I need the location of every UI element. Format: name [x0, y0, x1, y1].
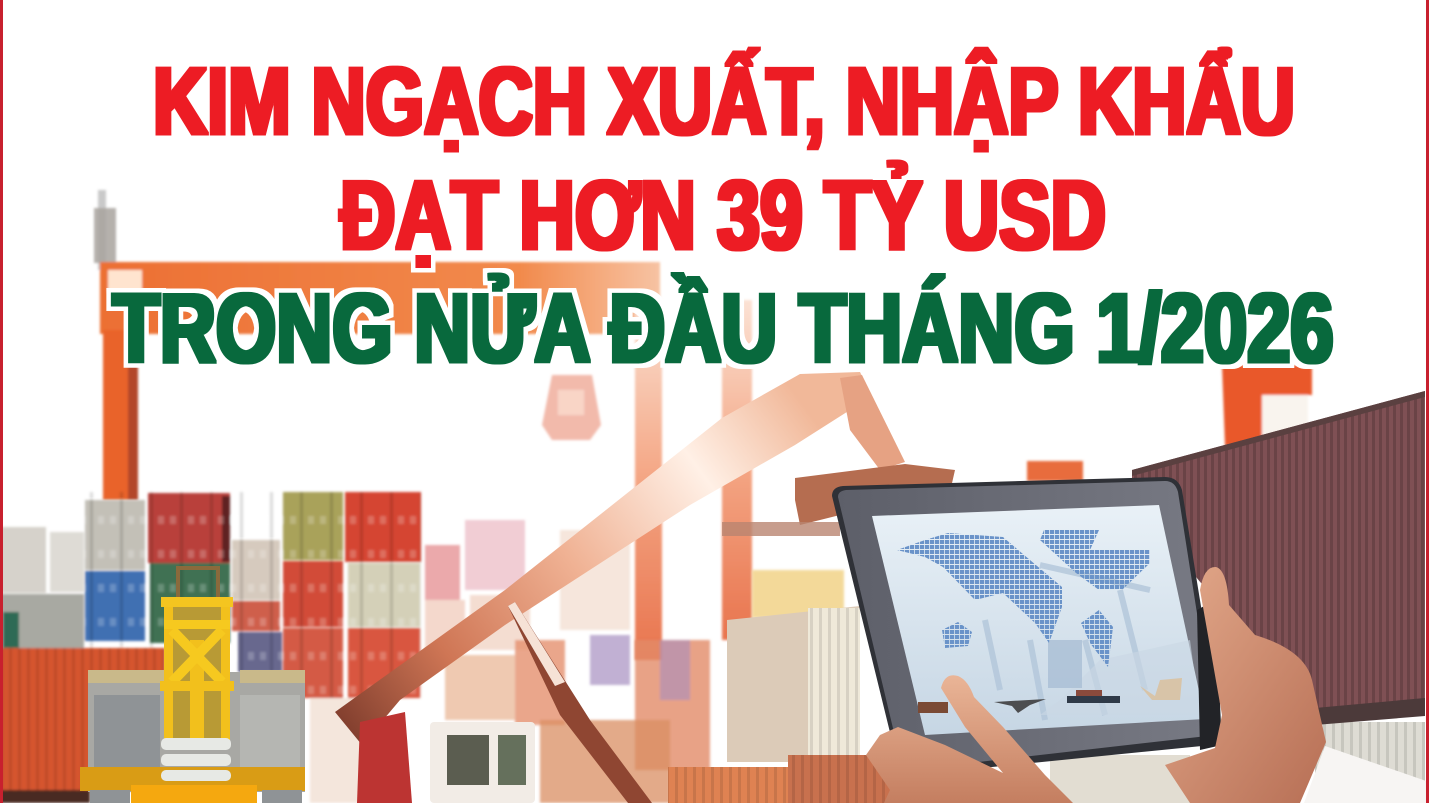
yellow forklift: [80, 568, 305, 803]
crane on screen: [985, 565, 1150, 720]
screen: [872, 505, 1205, 735]
hands: [866, 567, 1429, 803]
hydraulic ram: [508, 602, 652, 803]
left hand pointing finger: [866, 675, 1073, 803]
transport icons: [918, 678, 1182, 713]
tablet dark grip edge: [1197, 600, 1222, 750]
tablet with world map: [832, 477, 1222, 775]
page frame sides: [0, 0, 3, 803]
red cab base: [357, 712, 412, 803]
gantry crane: [94, 190, 1312, 660]
title: [112, 47, 1334, 383]
light containers behind tablet: [668, 606, 1425, 803]
container stacks: [0, 492, 844, 803]
world map: [897, 530, 1150, 667]
lower scrub: [540, 720, 670, 803]
right hand: [1165, 567, 1326, 803]
shirt cuff: [1304, 746, 1429, 803]
blurred port scene: [0, 190, 1312, 803]
reach stacker boom: [335, 372, 955, 803]
maroon container right: [1132, 391, 1425, 725]
tablet body: [832, 477, 1222, 775]
title line 2: ĐẠT HƠN 39 TỶ USD: [340, 160, 1106, 270]
crane head: [840, 375, 905, 470]
white cab: [430, 722, 535, 803]
